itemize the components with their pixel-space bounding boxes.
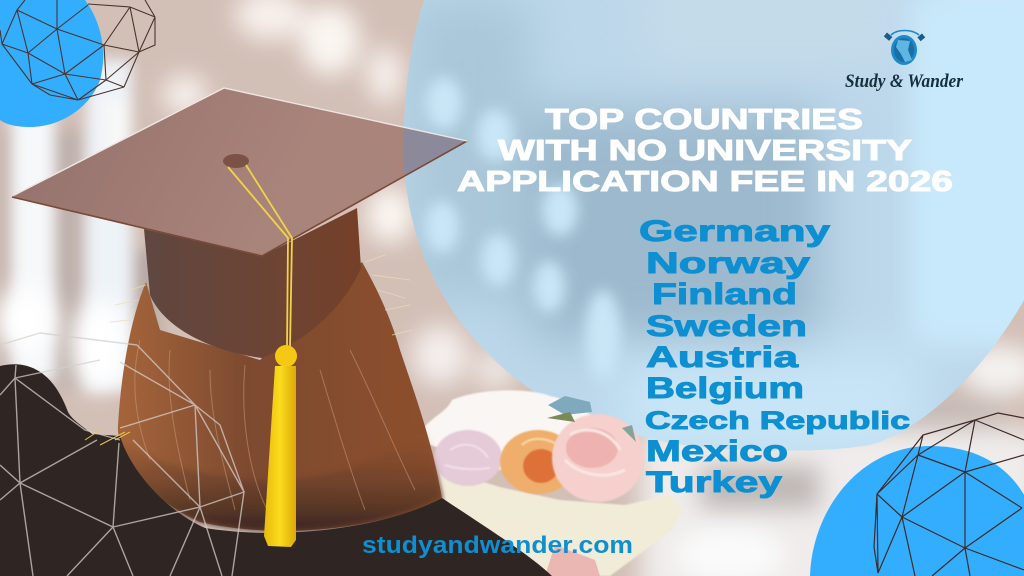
pink rose left (434, 430, 502, 486)
hair highlights (135, 340, 415, 515)
logo: wordmark: Study & Wander (845, 71, 964, 92)
bouquet wrapping paper (438, 468, 682, 576)
website url: studyandwander.com (362, 532, 633, 559)
cap base (144, 208, 361, 358)
tassel cord (228, 165, 292, 348)
title (457, 104, 953, 198)
cap button (223, 154, 249, 168)
blue blob: top left (0, 0, 103, 127)
bouquet white filler (417, 390, 610, 470)
tassel knob (275, 345, 297, 367)
country list (639, 215, 910, 499)
title: APPLICATION FEE IN 2026 (457, 166, 953, 198)
cap tint under blue circle (404, 128, 465, 175)
large translucent blue circle (400, 0, 1024, 460)
leaves (548, 396, 592, 415)
hair shadow (118, 425, 442, 531)
orange rose centre (500, 430, 576, 494)
country list: Belgium (646, 372, 804, 405)
title: WITH NO UNIVERSITY (498, 135, 912, 167)
pink rose right (552, 414, 644, 502)
blue blob: bottom right (810, 446, 1024, 576)
wire sphere: top left (0, 0, 155, 100)
country list: Mexico (646, 435, 788, 468)
country list: Finland (652, 278, 797, 311)
cap mortarboard (12, 88, 467, 256)
country list: Turkey (646, 466, 782, 499)
gown collar strands (85, 430, 130, 445)
graduate black gown (0, 364, 552, 576)
bouquet of roses (417, 390, 682, 576)
country list: Sweden (646, 310, 807, 343)
logo: globe icon (884, 30, 925, 65)
tassel (264, 366, 296, 547)
hair flyaway strands (110, 255, 412, 335)
geometric wire sphere: bottom left (0, 333, 244, 576)
country list: Germany (639, 215, 830, 248)
wire sphere: bottom right (874, 413, 1024, 576)
title: TOP COUNTRIES (545, 104, 863, 136)
graduate hair (118, 262, 442, 531)
country list: Czech Republic (645, 407, 910, 435)
graduation cap (12, 88, 467, 547)
country list: Norway (646, 247, 810, 280)
country list: Austria (646, 341, 798, 374)
